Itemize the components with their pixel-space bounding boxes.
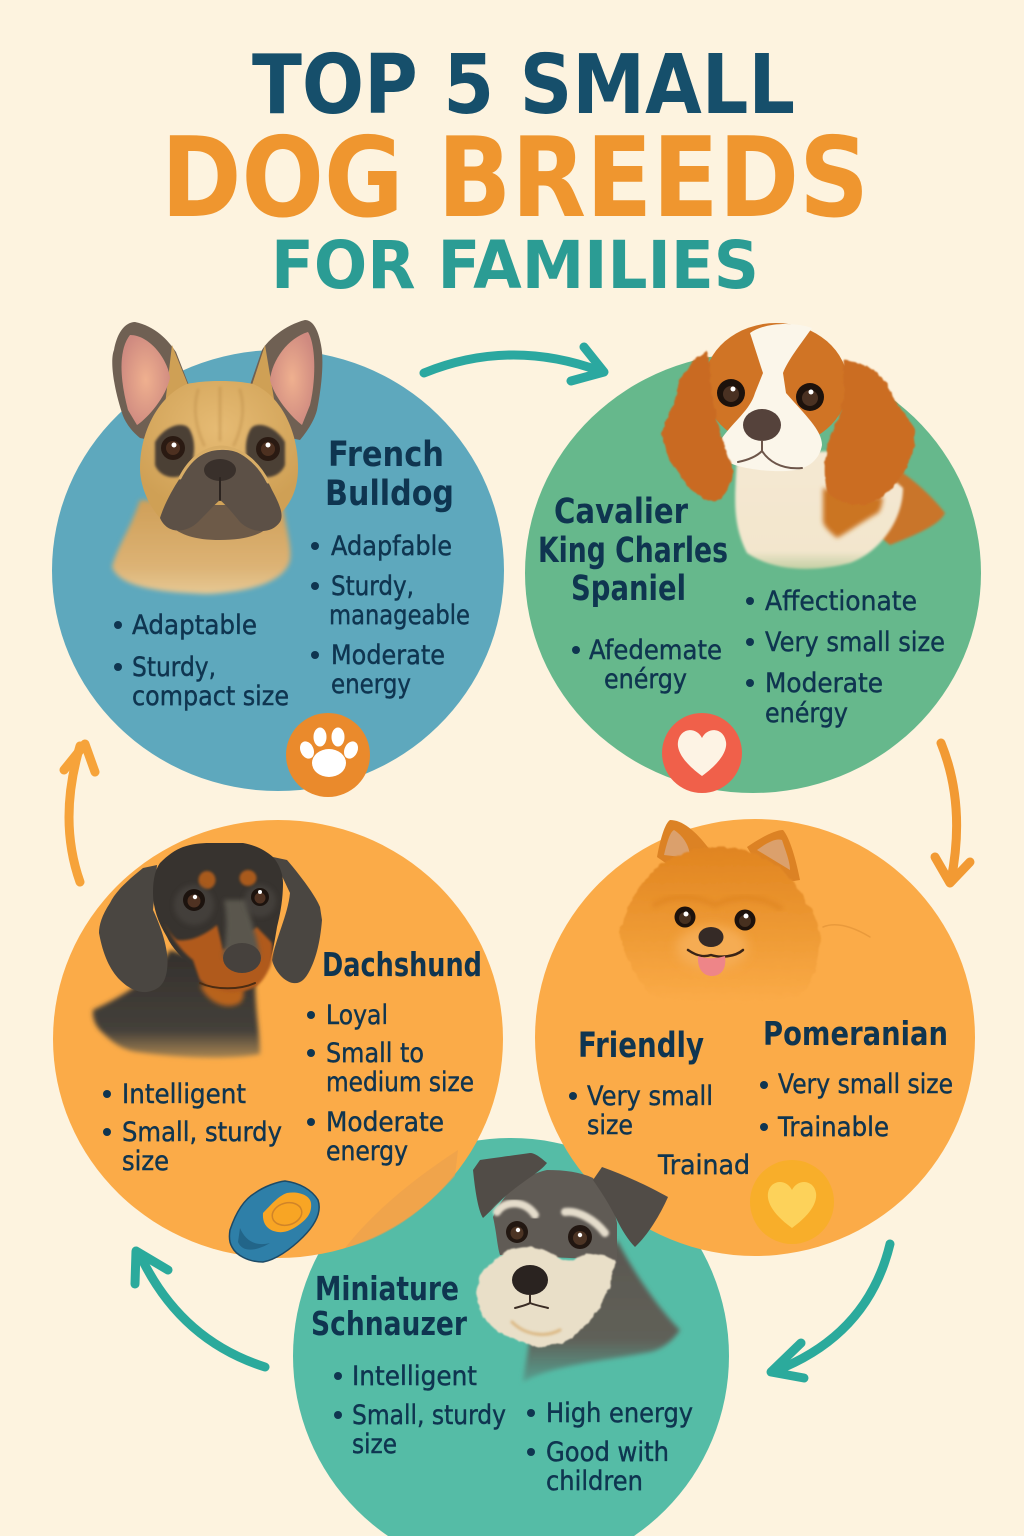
- arrow: cavalier to pomeranian: [935, 743, 970, 883]
- circle: dachshund: [53, 820, 503, 1258]
- title: DOG BREEDS: [161, 114, 869, 243]
- list: cavalier right: [746, 586, 945, 729]
- panel: miniature schnauzer content: [311, 1153, 693, 1497]
- list: schnauzer right: children: [546, 1466, 643, 1497]
- icon: heart badge: [662, 713, 742, 793]
- list: french bulldog left: Adaptable: [132, 610, 257, 641]
- heading: french bulldog: French: [328, 435, 444, 475]
- panel: dachshund: [53, 820, 503, 1262]
- heading: french bulldog: [325, 435, 454, 514]
- list: cavalier left: enérgy: [604, 664, 687, 695]
- list: dachshund right: Small to: [326, 1038, 424, 1069]
- list: schnauzer right: Good with: [546, 1437, 669, 1468]
- circle: cavalier: [525, 353, 981, 793]
- list: french bulldog left: Sturdy,: [132, 652, 216, 683]
- list: dachshund left: size: [122, 1146, 169, 1177]
- arrow: schnauzer to dachshund: [135, 1251, 265, 1367]
- icon: clicker toy: [229, 1181, 319, 1262]
- list: cavalier right: Very small size: [765, 627, 945, 658]
- list: dachshund right: Moderate: [326, 1107, 444, 1138]
- dog: cavalier king charles spaniel: [662, 323, 945, 569]
- circle: pomeranian: [535, 819, 975, 1256]
- panel: french bulldog: [52, 320, 504, 797]
- list: pomeranian right: Very small size: [778, 1069, 953, 1100]
- list: dachshund left: Small, sturdy: [122, 1117, 282, 1148]
- list: schnauzer right: [527, 1398, 693, 1497]
- list: pomeranian right: Trainable: [777, 1112, 889, 1143]
- list: cavalier right: Affectionate: [765, 586, 917, 617]
- list: dachshund left: Intelligent: [122, 1079, 246, 1110]
- heading: dachshund: Dachshund: [322, 945, 482, 984]
- panel: pomeranian: [535, 819, 975, 1256]
- list: pomeranian left: Trainad: [657, 1150, 750, 1181]
- dog: dachshund: [93, 843, 322, 1058]
- heading: french bulldog: Bulldog: [325, 474, 454, 514]
- title: [161, 38, 869, 304]
- list: cavalier right: enérgy: [765, 698, 848, 729]
- list: dachshund right: energy: [326, 1136, 408, 1167]
- circle: french bulldog: [52, 350, 504, 791]
- list: dachshund right: medium size: [326, 1067, 474, 1098]
- heading: cavalier: King Charles: [538, 531, 728, 571]
- title: TOP 5 SMALL: [252, 38, 795, 133]
- list: french bulldog left: compact size: [132, 681, 289, 712]
- heading: cavalier: Spaniel: [571, 569, 686, 609]
- list: pomeranian left: [569, 1081, 750, 1181]
- list: schnauzer left: size: [352, 1429, 397, 1460]
- panel: miniature schnauzer circle: [293, 1138, 729, 1536]
- list: dachshund right: Loyal: [326, 1000, 388, 1031]
- list: cavalier left: [572, 635, 722, 695]
- list: cavalier left: Afedemate: [589, 635, 722, 666]
- list: french bulldog right: Moderate: [331, 640, 445, 671]
- title: FOR FAMILIES: [271, 227, 759, 304]
- arrow: pomeranian to schnauzer: [771, 1244, 890, 1378]
- list: french bulldog right: Sturdy,: [331, 571, 414, 602]
- list: pomeranian left: Very small: [587, 1081, 713, 1112]
- panel: cavalier king charles spaniel: [525, 323, 981, 793]
- list: cavalier right: Moderate: [765, 668, 883, 699]
- list: french bulldog right: manageable: [329, 600, 470, 631]
- list: dachshund left: [103, 1079, 282, 1177]
- list: schnauzer left: Small, sturdy: [352, 1400, 506, 1431]
- arrow: dachshund to bulldog: [64, 744, 95, 882]
- heading: miniature schnauzer: Miniature: [315, 1269, 459, 1308]
- icon: yellow heart badge: [750, 1160, 834, 1244]
- list: dachshund right: [307, 1000, 474, 1167]
- list: pomeranian left: size: [587, 1110, 633, 1141]
- list: schnauzer left: [334, 1361, 506, 1460]
- heading: pomeranian: Pomeranian: [763, 1014, 948, 1053]
- arrow: bulldog to cavalier: [424, 347, 604, 381]
- dog: french bulldog: [112, 320, 322, 594]
- heading: friendly: Friendly: [578, 1026, 704, 1066]
- list: schnauzer left: Intelligent: [352, 1361, 477, 1392]
- list: french bulldog left: [114, 610, 289, 712]
- icon: paw badge: [286, 713, 370, 797]
- list: schnauzer right: High energy: [546, 1398, 693, 1429]
- heading: cavalier: Cavalier: [554, 492, 689, 532]
- list: french bulldog right: energy: [331, 669, 411, 700]
- list: french bulldog right: [311, 531, 470, 700]
- decorative shade band: [345, 1150, 458, 1248]
- dog: pomeranian: [620, 820, 870, 1002]
- dog: miniature schnauzer: [473, 1153, 680, 1382]
- list: pomeranian right: [760, 1069, 953, 1143]
- heading: cavalier: [538, 492, 728, 609]
- list: french bulldog right: Adapfable: [331, 531, 452, 562]
- heading: miniature schnauzer: Schnauzer: [311, 1304, 468, 1343]
- heading: miniature schnauzer: [311, 1269, 468, 1343]
